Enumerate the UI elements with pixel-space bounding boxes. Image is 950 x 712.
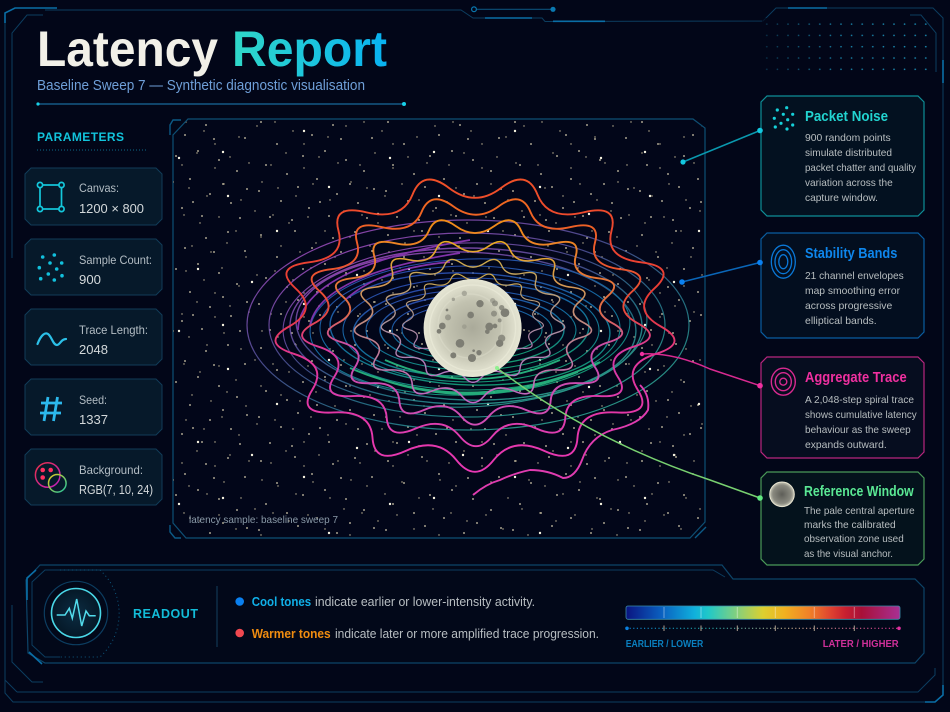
- panel: main chart: [170, 119, 706, 539]
- title rule: [36, 102, 406, 106]
- chart caption: latency sample: baseline sweep 7: [189, 514, 338, 526]
- arrow: aggregate trace connector: [640, 352, 763, 389]
- panel: packet noise: Packet Noise: [805, 109, 888, 125]
- panel: canvas parameter: Canvas:: [79, 181, 119, 195]
- panel: reference window: marks the calibrated: [804, 519, 896, 531]
- panel: trace length parameter: [25, 309, 162, 365]
- panel: background parameter: Background:: [79, 463, 143, 477]
- icon: scattered samples: [38, 253, 64, 282]
- panel: stability bands: map smoothing error: [805, 285, 900, 297]
- panel: sample count parameter: Sample Count:: [79, 253, 152, 267]
- panel: aggregate trace: expands outward.: [805, 439, 887, 451]
- panel: aggregate trace: shows cumulative latency: [805, 409, 917, 421]
- panel: packet noise: capture window.: [805, 192, 878, 204]
- panel: readout: [26, 565, 924, 664]
- legend: cool tones: Cool tones: [252, 595, 311, 609]
- arrow: packet noise connector: [680, 128, 763, 165]
- panel: trace length parameter: 2048: [79, 342, 108, 357]
- legend: warmer tones: Warmer tones: [252, 627, 331, 641]
- panel: aggregate trace: behaviour as the sweep: [805, 424, 911, 436]
- packet noise points: [173, 119, 706, 539]
- panel: canvas parameter: 1200 × 800: [79, 201, 144, 216]
- panel: trace length parameter: Trace Length:: [79, 323, 148, 337]
- panel: packet noise: variation across the: [805, 177, 893, 189]
- panel: reference window: The pale central aperture: [804, 505, 915, 517]
- title: [37, 21, 387, 77]
- subtitle: Baseline Sweep 7 — Synthetic diagnostic visualisation: [37, 78, 365, 94]
- panel: reference window: Reference Window: [804, 484, 914, 500]
- icon: trace wave: [38, 333, 66, 345]
- panel: reference window: [761, 472, 924, 565]
- heading: readout: READOUT: [133, 607, 198, 621]
- panel: background parameter: [25, 449, 162, 505]
- circuit ornament top: [472, 7, 556, 12]
- heading: parameters: PARAMETERS: [37, 130, 124, 144]
- panel: packet noise: simulate distributed: [805, 147, 892, 159]
- title: Report: [232, 21, 387, 77]
- dot grid top right: [762, 18, 928, 75]
- legend: cool tones: indicate earlier or lower-intensity activity.: [315, 595, 535, 609]
- panel: stability bands: [761, 233, 924, 338]
- icon: elliptical bands: [771, 245, 795, 278]
- panel: reference window: as the visual anchor.: [804, 548, 893, 560]
- icon: noise points: [773, 106, 794, 131]
- icon: target rings: [771, 368, 795, 395]
- panel: aggregate trace: [761, 357, 924, 458]
- title: Latency: [37, 21, 218, 77]
- panel: aggregate trace: A 2,048-step spiral trace: [805, 394, 914, 406]
- icon: pulse: [44, 581, 108, 645]
- panel: reference window: observation zone used: [804, 533, 904, 545]
- icon: aperture: [770, 482, 794, 507]
- colour scale: LATER / HIGHER: [823, 639, 899, 650]
- icon: hash: [40, 397, 62, 421]
- panel: stability bands: Stability Bands: [805, 246, 897, 262]
- panel: seed parameter: 1337: [79, 412, 108, 427]
- panel: packet noise: [761, 96, 924, 216]
- panel: sample count parameter: [25, 239, 162, 295]
- icon: canvas: [37, 182, 64, 212]
- panel: seed parameter: Seed:: [79, 393, 107, 407]
- arrow: reference window connector: [495, 366, 763, 501]
- heading: parameters: [37, 130, 146, 150]
- legend: warmer tones: indicate later or more amplified trace progression.: [335, 627, 599, 641]
- panel: canvas parameter: [25, 168, 162, 225]
- aggregate trace: [275, 179, 675, 495]
- reference window: [424, 279, 522, 377]
- panel: sample count parameter: 900: [79, 272, 101, 287]
- panel: packet noise: packet chatter and quality: [805, 162, 917, 174]
- panel: stability bands: 21 channel envelopes: [805, 270, 904, 282]
- icon: colour circles: [35, 463, 66, 492]
- stability bands: [247, 220, 689, 430]
- arrow: stability bands connector: [679, 260, 763, 285]
- craters: [437, 291, 509, 362]
- panel: stability bands: across progressive: [805, 300, 892, 312]
- panel: seed parameter: [25, 379, 162, 435]
- panel: background parameter: RGB(7, 10, 24): [79, 482, 153, 497]
- colour scale: EARLIER / LOWER: [626, 639, 704, 650]
- panel: packet noise: 900 random points: [805, 132, 891, 144]
- panel: stability bands: elliptical bands.: [805, 315, 877, 327]
- colour scale: [625, 606, 901, 650]
- panel: aggregate trace: Aggregate Trace: [805, 370, 907, 386]
